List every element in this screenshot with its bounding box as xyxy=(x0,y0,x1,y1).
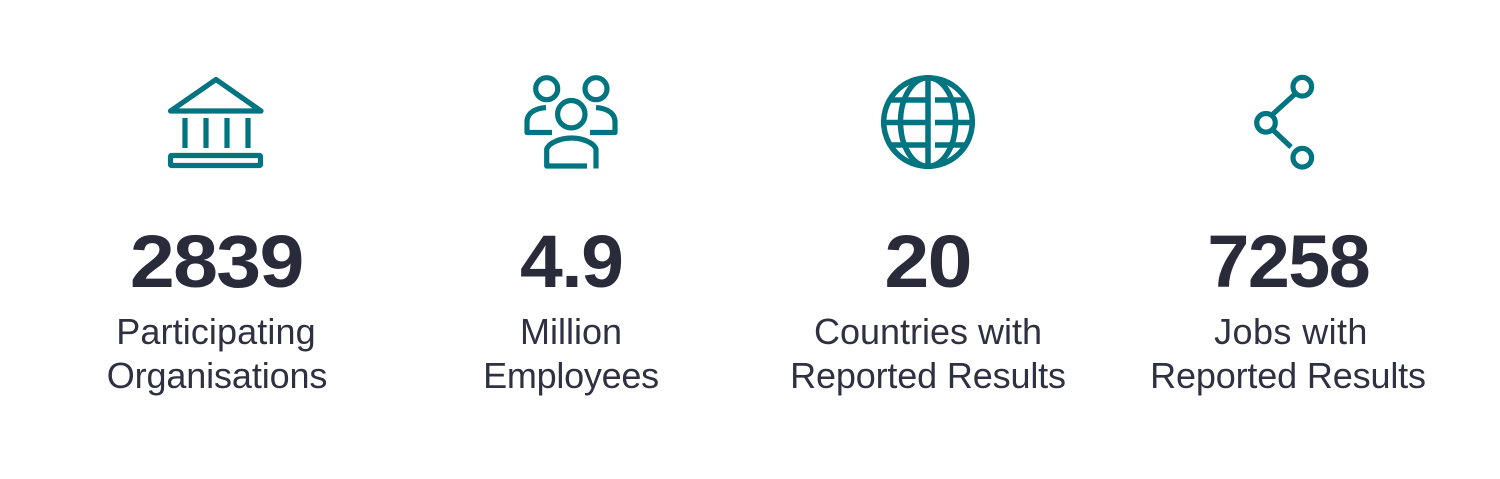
stat: participating organisations xyxy=(107,220,327,396)
label: Jobs with Reported Results: Jobs with xyxy=(1214,311,1368,352)
label: Participating Organisations: Organisations xyxy=(107,355,327,396)
icon: globe xyxy=(884,78,972,166)
stat: jobs xyxy=(1150,220,1426,396)
label: Million Employees: Employees xyxy=(483,355,659,396)
stat: million employees xyxy=(483,220,659,396)
label: Countries with Reported Results xyxy=(790,311,1066,396)
number: 20: 20 xyxy=(885,220,971,303)
label: Countries with Reported Results: Countries with xyxy=(814,311,1042,352)
label: Million Employees xyxy=(483,311,659,396)
label: Participating Organisations: Participating xyxy=(116,311,316,352)
label: Participating Organisations xyxy=(107,311,327,396)
stat: countries xyxy=(790,220,1066,396)
label: Jobs with Reported Results xyxy=(1150,311,1426,396)
label: Million Employees: Million xyxy=(520,311,622,352)
number: 7258: 7258 xyxy=(1207,220,1369,303)
number: 4.9: 4.9 xyxy=(520,220,622,303)
icon: share nodes xyxy=(1257,77,1312,167)
label: Countries with Reported Results: Reported Results xyxy=(790,355,1066,396)
label: Jobs with Reported Results: Reported Results xyxy=(1150,355,1426,396)
icon: institution building xyxy=(170,80,261,166)
number: 2839: 2839 xyxy=(130,220,302,303)
icon: group of people xyxy=(527,78,615,168)
